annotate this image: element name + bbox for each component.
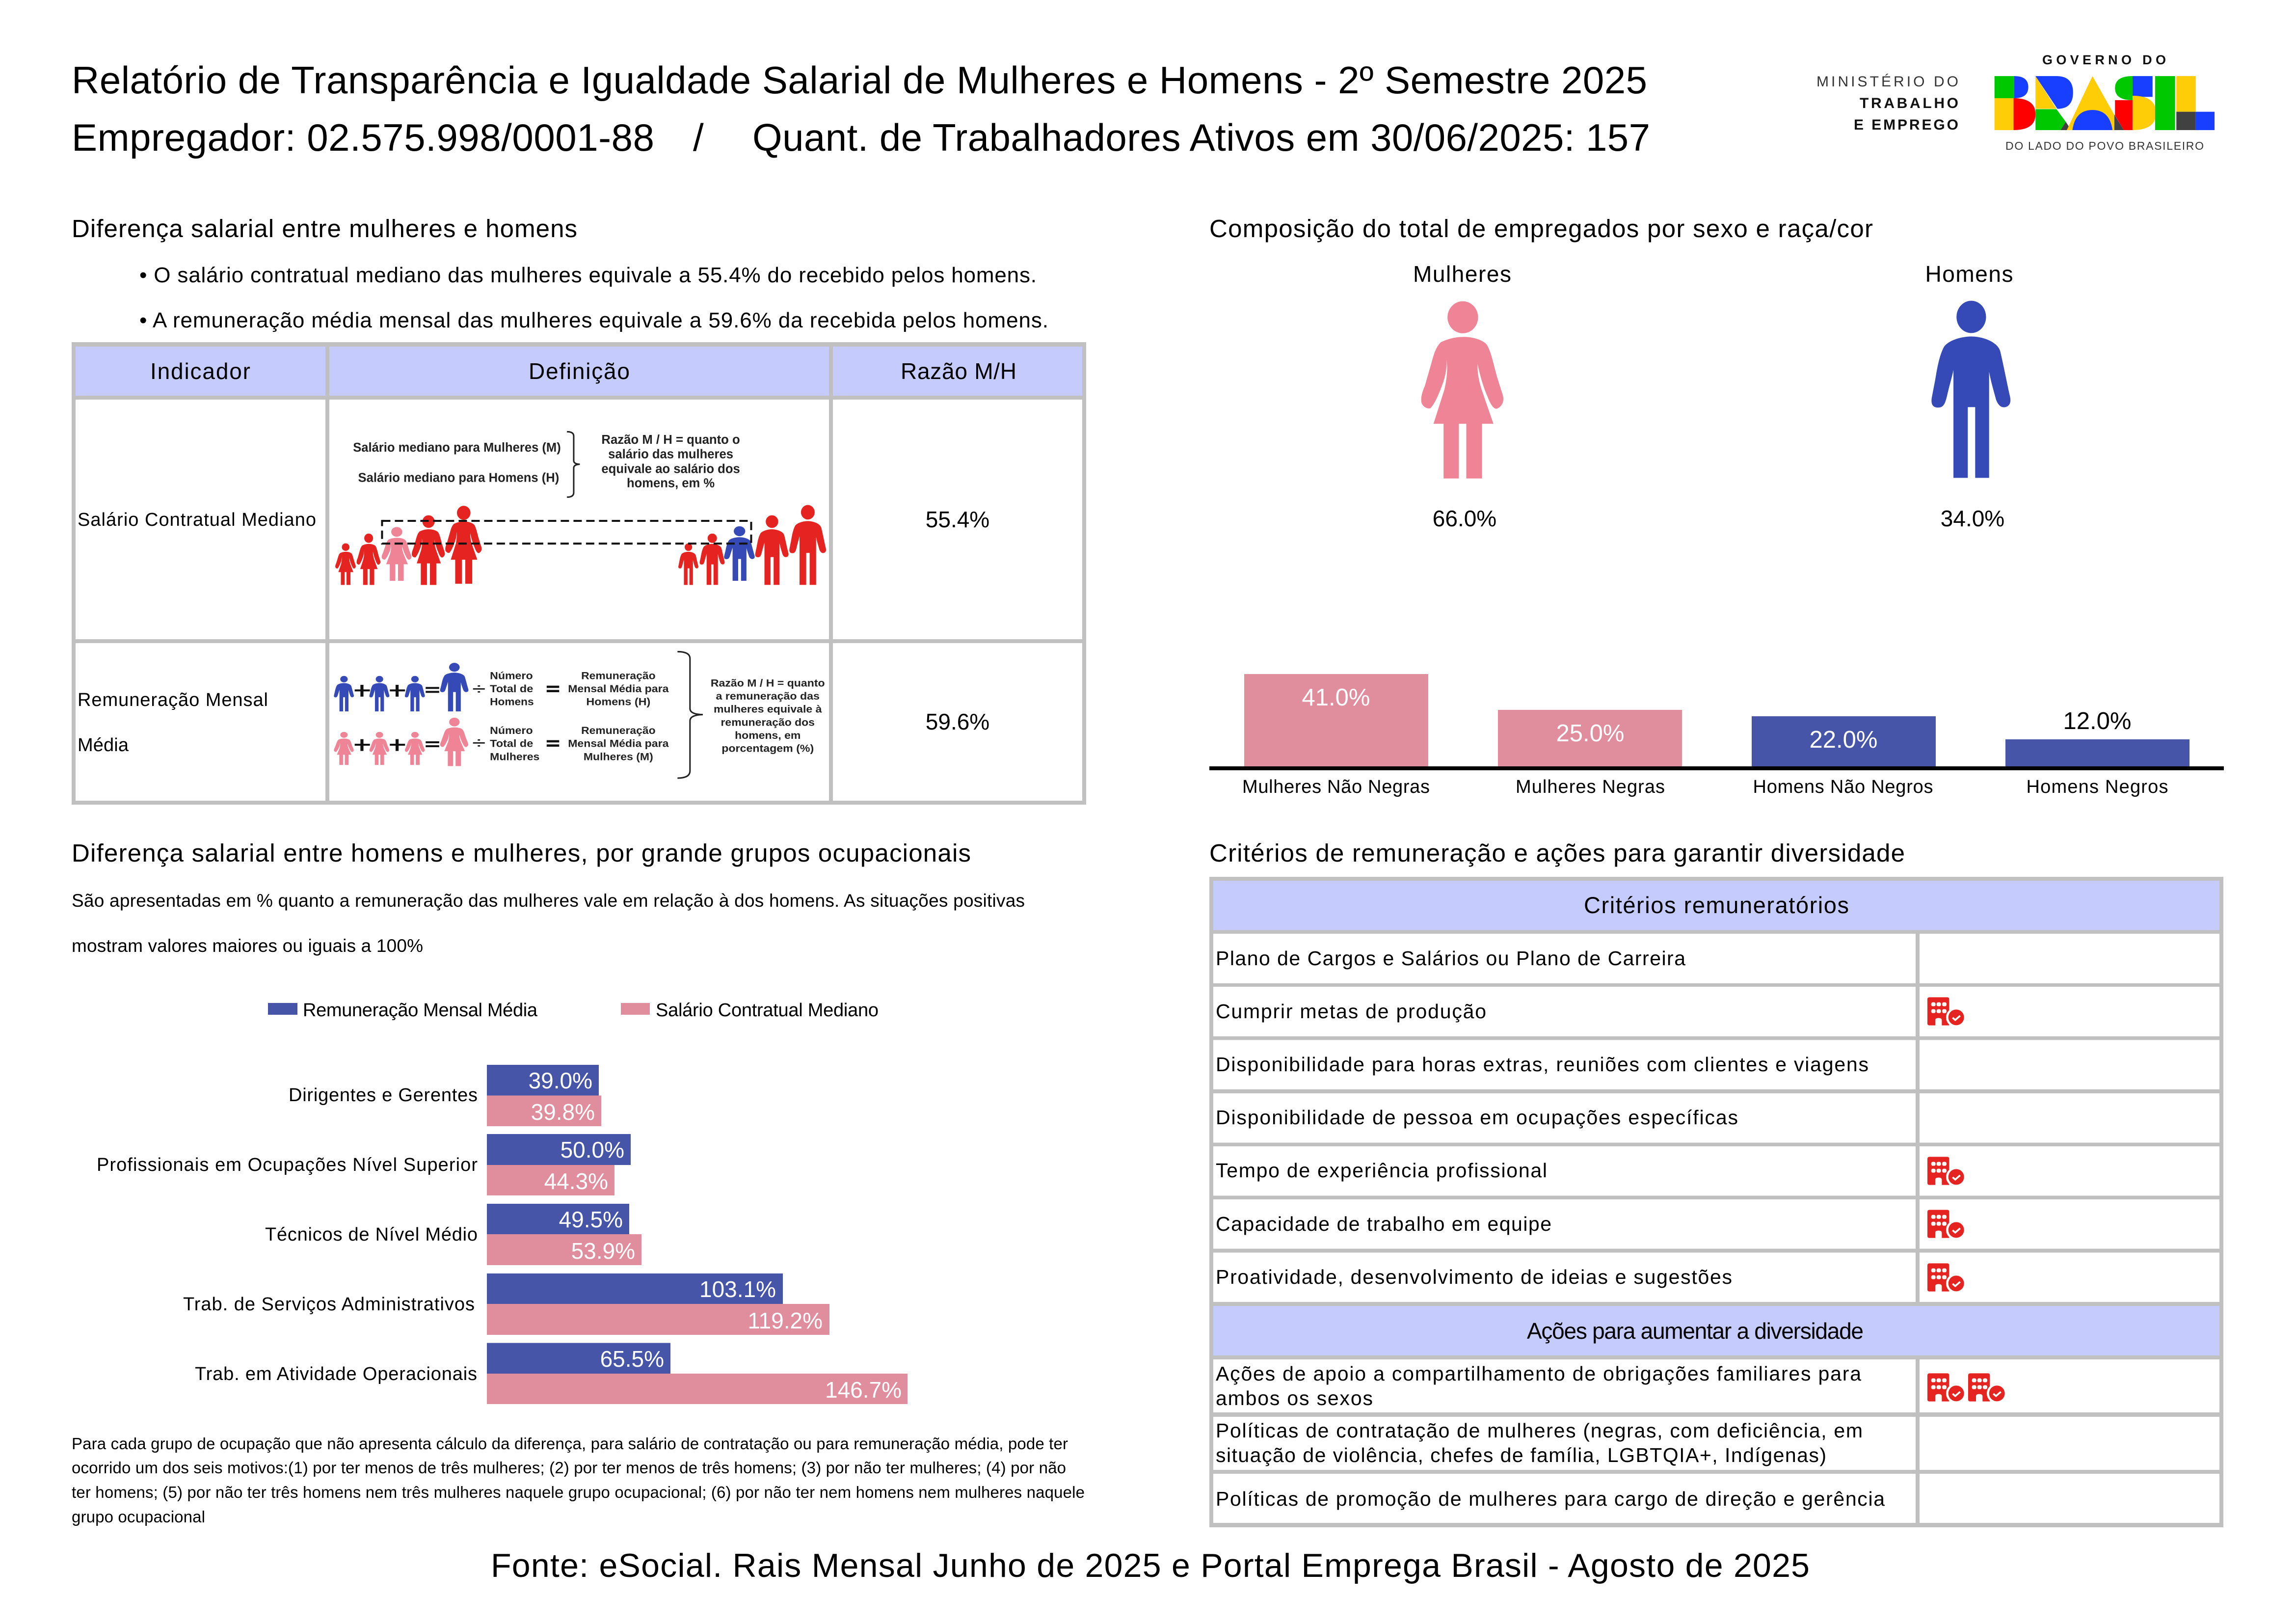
ratio explanation: homens, em: [735, 730, 801, 741]
bar: mulheres não negras: 41.0%: [1302, 684, 1370, 711]
slogan: DO LADO DO POVO BRASILEIRO: [2005, 139, 2204, 152]
divisors: [490, 670, 539, 762]
icon: empresa equipe: [1927, 1210, 1966, 1240]
row: salário contratual: Salário Contratual Mediano: [78, 510, 316, 530]
ratio explanation: remuneração dos: [721, 717, 815, 728]
footnote: Para cada grupo de ocupação que não apresenta cálculo da diferença, para salário de contratação ou para remuneração média, pode ter: [72, 1435, 1068, 1453]
ratio explanation: salário das mulheres: [608, 447, 733, 461]
intro text: mostram valores maiores ou iguais a 100%: [72, 936, 423, 956]
axis labels: Homens Não Negros: [1753, 777, 1933, 797]
criteria rows: [1216, 947, 1869, 1288]
divisors: Total de: [490, 683, 533, 695]
group: atividade operacional: [195, 1343, 908, 1404]
legend: Remuneração Mensal Média: [303, 1000, 538, 1021]
results: Mensal Média para: [568, 683, 669, 695]
ministry wordmark: MINISTÉRIO DO: [1816, 74, 1958, 90]
axis labels: Homens Negros: [2026, 777, 2168, 797]
chart: grupos ocupacionais: [97, 1065, 908, 1404]
women figures: [335, 506, 481, 585]
group: atividade operacional: 65.5%: [600, 1346, 664, 1372]
ratio explanation: porcentagem (%): [721, 743, 814, 755]
government heading: GOVERNO DO: [2042, 53, 2166, 67]
axis labels: Mulheres Não Negras: [1242, 777, 1430, 797]
action rows: Políticas de promoção de mulheres para cargo de direção e gerência: [1216, 1488, 1885, 1510]
title line 2: employer: Quant. de Trabalhadores Ativos em 30/06/2025: 157: [752, 116, 1650, 159]
icon: empresa ações 2: [1968, 1373, 2006, 1403]
criteria rows: Disponibilidade para horas extras, reuniões com clientes e viagens: [1216, 1053, 1869, 1076]
group: atividade operacional: 146.7%: [825, 1377, 902, 1403]
source line: Fonte: eSocial. Rais Mensal Junho de 2025 e Portal Emprega Brasil - Agosto de 2025: [491, 1547, 1810, 1584]
bar: mulheres negras: 25.0%: [1556, 720, 1624, 747]
heading: critérios: Critérios de remuneração e ações para garantir diversidade: [1209, 839, 1905, 867]
men figures: [678, 505, 826, 585]
chart: raça/cor: [1209, 674, 2224, 797]
ratio explanation: homens, em %: [627, 476, 715, 490]
label: mulheres: Mulheres: [1413, 261, 1511, 287]
legend: Salário Contratual Mediano: [656, 1000, 879, 1021]
group: profissionais: [97, 1134, 631, 1195]
panel: critérios e ações: [1209, 877, 2223, 1527]
ministry wordmark: TRABALHO: [1860, 95, 1958, 111]
action rows: ambos os sexos: [1216, 1387, 1373, 1409]
brace: [677, 651, 703, 778]
group: profissionais: 44.3%: [544, 1168, 608, 1194]
results: Mensal Média para: [568, 738, 669, 750]
diagram: salário mediano: Salário mediano para Homens (H): [358, 470, 559, 485]
divisors: Número: [490, 670, 533, 681]
divisors: Total de: [490, 738, 533, 750]
logo: brasil wordmark shapes: [1995, 76, 2215, 130]
group: serviços administrativos: 103.1%: [699, 1276, 776, 1302]
group: técnicos: 49.5%: [559, 1207, 623, 1232]
criteria rows: Disponibilidade de pessoa em ocupações específicas: [1216, 1106, 1738, 1129]
table header labels: [150, 358, 1016, 384]
dashed median box: [382, 521, 751, 543]
header: critérios remuneratórios: Critérios remuneratórios: [1584, 892, 1849, 918]
group: dirigentes: Dirigentes e Gerentes: [289, 1085, 478, 1106]
intro text: [72, 891, 1025, 956]
footnote: [72, 1435, 1085, 1526]
group: atividade operacional: Trab. em Atividade Operacionais: [195, 1364, 477, 1384]
diagram: salário mediano: Razão M / H = quanto o: [601, 433, 740, 447]
icon: empresa ações 1: [1927, 1373, 1966, 1403]
bar: homens negros: [2005, 708, 2189, 766]
divisors: Mulheres: [490, 751, 539, 762]
icon: homem: [1931, 301, 2010, 478]
bar: mulheres negras: [1498, 710, 1682, 766]
ministry wordmark: [1816, 74, 1958, 133]
criteria rows: Plano de Cargos e Salários ou Plano de Carreira: [1216, 947, 1685, 970]
row: remuneração mensal: [78, 690, 989, 756]
ratio explanation: [601, 433, 740, 490]
ratio explanation: Razão M / H = quanto: [711, 677, 825, 689]
heading: grandes grupos ocupacionais: Diferença salarial entre homens e mulheres, por grande grupos ocupacionais: [72, 839, 971, 867]
group: serviços administrativos: 119.2%: [748, 1308, 823, 1333]
group: técnicos: [265, 1204, 641, 1265]
group: dirigentes: [289, 1065, 601, 1126]
bar: homens negros: 12.0%: [2063, 708, 2131, 734]
men sum: [334, 663, 468, 711]
row: remuneração mensal: Remuneração Mensal: [78, 690, 268, 710]
footnote: grupo ocupacional: [72, 1508, 205, 1526]
axis labels: [1242, 777, 2168, 797]
divisors: Homens: [490, 696, 534, 708]
ratio explanation: a remuneração das: [716, 691, 820, 702]
title line 2: employer: Empregador: 02.575.998/0001-88: [72, 116, 654, 159]
footnote: ocorrido um dos seis motivos:(1) por ter menos de três mulheres; (2) por ter menos de três homens; (3) por não ter mulheres; (4) por não: [72, 1459, 1066, 1477]
action rows: Ações de apoio a compartilhamento de obrigações familiares para: [1216, 1362, 1861, 1385]
diagram: salário mediano: Salário mediano para Mulheres (M): [353, 440, 561, 455]
title line 2: employer: [72, 116, 1650, 159]
group: dirigentes: 39.8%: [531, 1099, 595, 1125]
icon: empresa cumprir metas: [1927, 997, 1966, 1027]
bullet 1: • O salário contratual mediano das mulheres equivale a 55.4% do recebido pelos homens.: [139, 263, 1037, 287]
row: salário contratual: [78, 507, 989, 532]
intro text: São apresentadas em % quanto a remuneração das mulheres vale em relação à dos homens. As situações positivas: [72, 891, 1025, 911]
bar: homens não negros: [1752, 716, 1936, 766]
heading: composição: Composição do total de empregados por sexo e raça/cor: [1209, 215, 1873, 243]
title line 2: employer: /: [693, 116, 704, 159]
icon: empresa proatividade: [1927, 1263, 1966, 1293]
group: profissionais: Profissionais em Ocupações Nível Superior: [97, 1155, 478, 1175]
icon: mulher: [1421, 301, 1503, 479]
legend: [268, 1000, 879, 1021]
action rows: situação de violência, chefes de família, LGBTQIA+, Indígenas): [1216, 1444, 1826, 1466]
value: homens: 34.0%: [1941, 506, 2004, 531]
divisors: Número: [490, 725, 533, 736]
icon: empresa experiência: [1927, 1157, 1966, 1187]
brace: [567, 432, 580, 497]
row: remuneração mensal: Média: [78, 735, 129, 756]
axis labels: Mulheres Negras: [1516, 777, 1665, 797]
group: técnicos: 53.9%: [571, 1238, 635, 1264]
ratio explanation: [711, 677, 825, 755]
median text: [353, 440, 561, 485]
label: homens: Homens: [1925, 261, 2013, 287]
results: Homens (H): [586, 696, 650, 708]
group: técnicos: Técnicos de Nível Médio: [265, 1224, 478, 1245]
results: Mulheres (M): [584, 751, 653, 762]
diagram: salário mediano: [335, 432, 826, 585]
group: serviços administrativos: Trab. de Serviços Administrativos: [183, 1294, 475, 1315]
group: dirigentes: 39.0%: [529, 1068, 592, 1093]
criteria rows: Cumprir metas de produção: [1216, 1000, 1486, 1023]
ministry wordmark: E EMPREGO: [1854, 117, 1958, 133]
table header labels: Definição: [529, 358, 630, 384]
operators: [355, 685, 559, 751]
value: mulheres: 66.0%: [1433, 506, 1496, 531]
group: serviços administrativos: [183, 1273, 829, 1335]
footnote: ter homens; (5) por não ter três homens nem três mulheres naquele grupo ocupacional; (6) por não ter nem homens nem mulheres naquele: [72, 1483, 1085, 1501]
row: remuneração mensal: 59.6%: [926, 709, 989, 734]
criteria rows: Tempo de experiência profissional: [1216, 1159, 1547, 1182]
title line 1: Relatório de Transparência e Igualdade Salarial de Mulheres e Homens - 2º Semestre 2025: [72, 58, 1647, 102]
table header labels: Razão M/H: [901, 358, 1016, 384]
criteria rows: Capacidade de trabalho em equipe: [1216, 1213, 1551, 1235]
diagram: salário mediano: equivale ao salário dos: [601, 461, 740, 476]
ratio explanation: mulheres equivale à: [714, 704, 822, 715]
panel: tabela de indicadores: [72, 342, 1086, 805]
table header labels: Indicador: [150, 358, 250, 384]
results: [568, 670, 669, 762]
bar: homens não negros: 22.0%: [1810, 727, 1877, 753]
bar: mulheres não negras: [1244, 674, 1428, 766]
diagram: remuneração média: [334, 651, 825, 778]
women sum: [334, 718, 468, 766]
action rows: Políticas de contratação de mulheres (negras, com deficiência, em: [1216, 1419, 1863, 1442]
action rows: [1216, 1362, 1885, 1510]
row: salário contratual: 55.4%: [926, 507, 989, 532]
criteria rows: Proatividade, desenvolvimento de ideias e sugestões: [1216, 1266, 1732, 1288]
results: Remuneração: [581, 725, 656, 736]
group: profissionais: 50.0%: [561, 1137, 624, 1163]
bullet 2: • A remuneração média mensal das mulheres equivale a 59.6% da recebida pelos homens.: [139, 308, 1048, 332]
results: Remuneração: [581, 670, 656, 681]
header: ações: Ações para aumentar a diversidade: [1527, 1318, 1864, 1344]
heading: diferença salarial: Diferença salarial entre mulheres e homens: [72, 215, 577, 243]
